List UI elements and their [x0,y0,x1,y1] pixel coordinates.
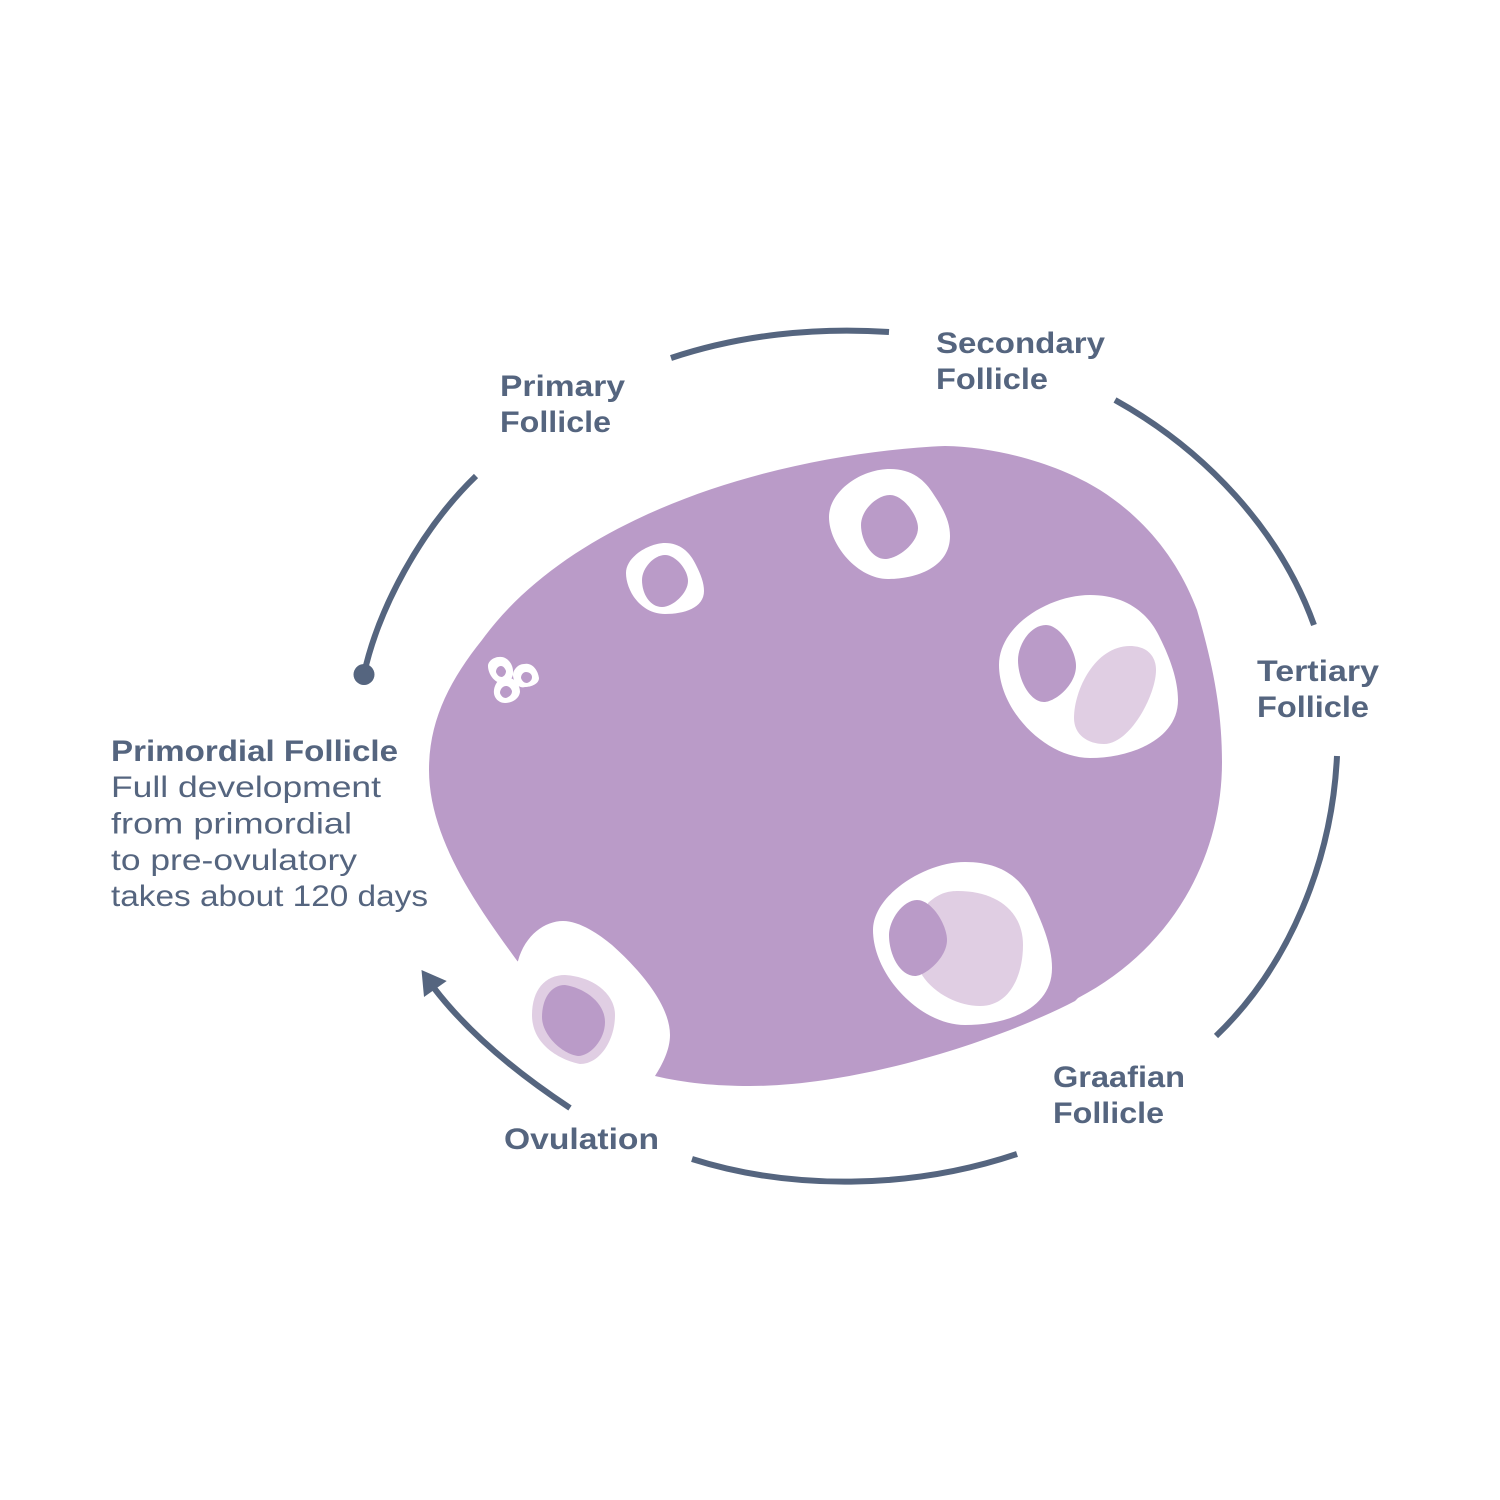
text block: primordial follicle description: Primordial Follicle [111,735,398,768]
cycle arc: tertiary to graafian [1216,756,1337,1036]
cycle arc: primary to secondary [671,331,889,358]
label: secondary follicle: Follicle [936,363,1048,396]
text block: primordial follicle description [111,735,428,913]
label: primary follicle: Follicle [500,406,611,439]
text block: primordial follicle description: Full development [111,771,382,804]
label: primary follicle [500,370,625,439]
label: tertiary follicle [1257,655,1379,724]
text block: primordial follicle description: to pre-ovulatory [111,844,357,877]
tertiary follicle [999,595,1178,758]
cycle arc: graafian to ovulation [692,1154,1017,1182]
label: primary follicle: Primary [500,370,625,403]
ovary shape [429,446,1222,1086]
ovulation follicle [480,921,670,1100]
primordial follicles [488,657,539,703]
label: tertiary follicle: Tertiary [1257,655,1379,688]
graafian follicle [873,862,1052,1025]
secondary follicle [829,469,950,579]
label: graafian follicle: Graafian [1053,1061,1185,1094]
label: graafian follicle: Follicle [1053,1097,1164,1130]
label: secondary follicle: Secondary [936,327,1105,360]
primary follicle [626,543,704,614]
label: graafian follicle [1053,1061,1185,1130]
label: secondary follicle [936,327,1105,396]
cycle arc: secondary to tertiary [1115,400,1314,625]
text block: primordial follicle description: takes about 120 days [111,880,428,913]
label: ovulation: Ovulation [504,1123,659,1156]
text block: primordial follicle description: from primordial [111,808,352,840]
cycle arc: primordial to primary with start dot [354,476,476,685]
label: tertiary follicle: Follicle [1257,691,1369,724]
arrow: ovulation back to start [422,970,570,1108]
